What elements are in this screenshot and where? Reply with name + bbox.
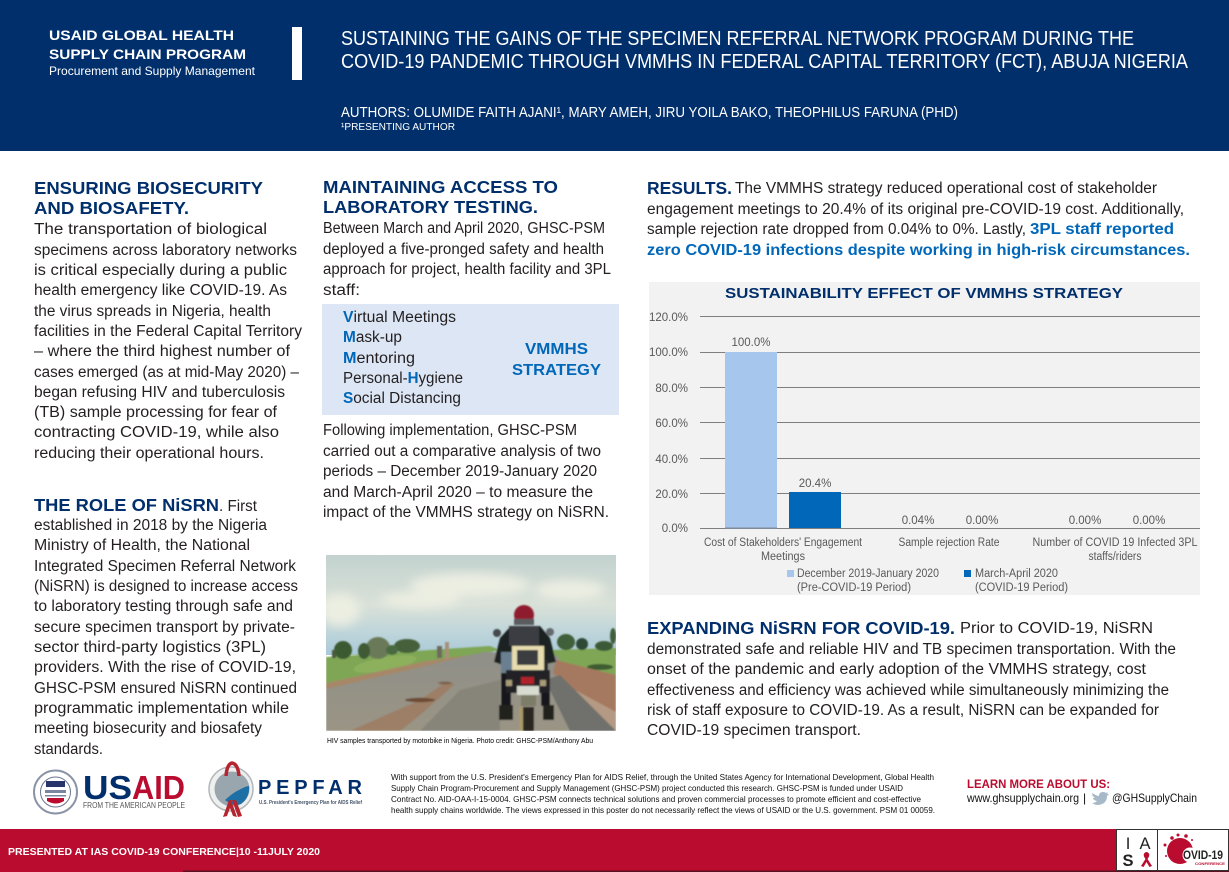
category labels: Sample rejection Rate: [898, 537, 1000, 549]
learn more links: www.ghsupplychain.org: [966, 791, 1079, 805]
learn more links: |: [1083, 791, 1086, 805]
section: results: [647, 178, 1190, 259]
section: the role of NiSRN: programmatic implementation while: [34, 700, 289, 717]
legend: March-April 2020: [975, 568, 1058, 580]
VMMHS list: Mask-up: [343, 329, 402, 346]
section: maintaining access to laboratory testing: MAINTAINING ACCESS TO: [323, 177, 558, 197]
section: results: zero COVID-19 infections despite working in high-risk circumstances.: [647, 242, 1190, 259]
logo: IAS and COVID-19 conference: I: [1126, 835, 1130, 853]
section: results: RESULTS.: [647, 178, 732, 198]
y axis labels: 120.0%: [649, 312, 688, 324]
text block: funding disclaimer: Contract No. AID-OAA-I-15-0004. GHSC-PSM connects technical solutions and proven commercial processes to promote efficient and cost-effective: [391, 794, 921, 804]
rider: [494, 626, 556, 668]
data labels: 0.00%: [1069, 515, 1101, 527]
section: expanding NiSRN for COVID-19: onset of the pandemic and early adoption of the VMMHS strategy, cost: [647, 661, 1147, 678]
section: ensuring biosecurity and biosafety: ENSURING BIOSECURITY: [34, 178, 263, 198]
y axis labels: 80.0%: [655, 383, 688, 395]
logo: USAID: AID: [132, 769, 185, 806]
category labels: staffs/riders: [1088, 551, 1142, 563]
VMMHS list: Mentoring: [343, 350, 415, 367]
category labels: [704, 537, 1198, 563]
section: ensuring biosecurity and biosafety: began refusing HIV and tuberculosis: [34, 384, 285, 401]
logo: USAID: FROM THE AMERICAN PEOPLE: [83, 801, 185, 810]
text block: funding disclaimer: [391, 772, 935, 815]
data labels: 20.4%: [799, 478, 831, 490]
section: ensuring biosecurity and biosafety: reducing their operational hours.: [34, 445, 264, 462]
logo: USAID: US: [83, 769, 132, 806]
section: ensuring biosecurity and biosafety: the virus spreads in Nigeria, health: [34, 303, 271, 320]
section: expanding NiSRN for COVID-19: COVID-19 specimen transport.: [647, 722, 861, 739]
VMMHS strategy label: [512, 341, 602, 379]
y axis labels: 20.0%: [655, 489, 688, 501]
logo: IAS and COVID-19 conference: A: [1139, 835, 1151, 853]
text block: funding disclaimer: With support from the U.S. President's Emergency Plan for AIDS Relief, through the United States Agency for International Development, Global Health: [391, 772, 934, 782]
section: maintaining access to laboratory testing: [323, 177, 611, 299]
data labels: 0.00%: [1133, 515, 1165, 527]
VMMHS list: Personal-Hygiene: [343, 370, 463, 387]
legend: (COVID-19 Period): [975, 582, 1068, 594]
section: the role of NiSRN: sector third-party logistics (3PL): [34, 639, 266, 656]
data labels: 0.00%: [966, 515, 998, 527]
section: ensuring biosecurity and biosafety: facilities in the Federal Capital Territory: [34, 323, 302, 340]
VMMHS list: Social Distancing: [343, 390, 461, 407]
learn more links: LEARN MORE ABOUT US:: [967, 777, 1110, 791]
text block: comparative analysis: periods – December 2019-January 2020: [323, 463, 597, 480]
section: results: 3PL staff reported: [1030, 221, 1174, 238]
section: maintaining access to laboratory testing: approach for project, health facility and 3PL: [323, 261, 611, 278]
section: results: The VMMHS strategy reduced operational cost of stakeholder: [735, 180, 1157, 197]
icon: twitter bird: [1092, 792, 1109, 805]
section: ensuring biosecurity and biosafety: AND BIOSAFETY.: [34, 198, 189, 218]
chart: sustainability effect of VMMHS strategy: [649, 282, 1200, 595]
text block: comparative analysis: [323, 422, 609, 521]
y axis labels: 60.0%: [655, 418, 688, 430]
section: the role of NiSRN: meeting biosecurity and biosafety: [34, 720, 262, 737]
section: the role of NiSRN: [34, 495, 298, 758]
section: ensuring biosecurity and biosafety: is critical especially during a public: [34, 262, 287, 279]
section: results: sample rejection rate dropped from 0.04% to 0%. Lastly,: [647, 221, 1026, 238]
authors: ¹PRESENTING AUTHOR: [341, 121, 455, 133]
poster title: [341, 28, 1189, 73]
section: the role of NiSRN: GHSC-PSM ensured NiSRN continued: [34, 680, 297, 697]
section: results: engagement meetings to 20.4% of its original pre-COVID-19 cost. Additionally,: [647, 201, 1184, 218]
section: expanding NiSRN for COVID-19: risk of staff exposure to COVID-19. As a result, NiSRN can be expanded for: [647, 702, 1159, 719]
photo caption: HIV samples transported by motorbike in Nigeria. Photo credit: GHSC-PSM/Anthony Abu: [327, 738, 593, 745]
learn more links: @GHSupplyChain: [1112, 791, 1197, 805]
authors: [341, 105, 958, 133]
section: ensuring biosecurity and biosafety: [34, 178, 302, 462]
section: maintaining access to laboratory testing: Between March and April 2020, GHSC-PSM: [323, 220, 605, 237]
section: the role of NiSRN: secure specimen transport by private-: [34, 619, 295, 636]
legend: [787, 568, 1068, 594]
logo: IAS and COVID-19 conference: CONFERENCE: [1195, 861, 1225, 866]
category labels: Cost of Stakeholders' Engagement: [704, 537, 863, 549]
category labels: Meetings: [761, 551, 805, 563]
VMMHS strategy label: VMMHS: [525, 341, 588, 358]
logo: USAID: [34, 769, 185, 814]
panel: VMMHS strategy box: [322, 304, 619, 415]
VMMHS list: Virtual Meetings: [343, 309, 456, 326]
section: the role of NiSRN: established in 2018 by the Nigeria: [34, 517, 267, 534]
section: maintaining access to laboratory testing: deployed a five-pronged safety and health: [323, 241, 604, 258]
learn more links: [966, 777, 1197, 805]
logo: IAS and COVID-19 conference: [1116, 829, 1229, 871]
section: the role of NiSRN: providers. With the rise of COVID-19,: [34, 659, 296, 676]
section: ensuring biosecurity and biosafety: cases emerged (as at mid-May 2020) –: [34, 364, 299, 381]
section: expanding NiSRN for COVID-19: [647, 618, 1176, 739]
text block: comparative analysis: carried out a comparative analysis of two: [323, 443, 601, 460]
logo: PEPFAR: PEPFAR: [258, 777, 363, 799]
section: maintaining access to laboratory testing: staff:: [323, 282, 360, 299]
header divider bar: [292, 27, 302, 80]
y axis labels: 40.0%: [655, 454, 688, 466]
section: ensuring biosecurity and biosafety: The transportation of biological: [34, 221, 267, 238]
data labels: [731, 337, 1165, 527]
text block: comparative analysis: and March-April 2020 – to measure the: [323, 484, 593, 501]
VMMHS strategy label: STRATEGY: [512, 362, 602, 379]
section: the role of NiSRN: to laboratory testing through safe and: [34, 598, 293, 615]
program name: [49, 27, 256, 78]
y axis labels: [649, 312, 688, 535]
section: ensuring biosecurity and biosafety: contracting COVID-19, while also: [34, 424, 279, 441]
section: the role of NiSRN: standards.: [34, 741, 103, 758]
section: the role of NiSRN: (NiSRN) is designed to increase access: [34, 578, 298, 595]
chart title: SUSTAINABILITY EFFECT OF VMMHS STRATEGY: [725, 285, 1123, 302]
logo: PEPFAR: [209, 763, 363, 817]
category labels: Number of COVID 19 Infected 3PL: [1032, 537, 1198, 549]
header banner: [0, 0, 1229, 151]
section: maintaining access to laboratory testing: LABORATORY TESTING.: [323, 197, 538, 217]
logo: IAS and COVID-19 conference: OVID-19: [1183, 848, 1223, 862]
VMMHS list: [343, 309, 463, 407]
section: the role of NiSRN: THE ROLE OF NiSRN: [34, 495, 219, 515]
logo: PEPFAR: U.S. President's Emergency Plan for AIDS Relief: [259, 800, 362, 806]
footer band: [0, 829, 1229, 872]
y axis labels: 0.0%: [662, 523, 688, 535]
poster title: SUSTAINING THE GAINS OF THE SPECIMEN REFERRAL NETWORK PROGRAM DURING THE: [341, 28, 1134, 50]
section: ensuring biosecurity and biosafety: (TB) sample processing for fear of: [34, 404, 278, 421]
text block: funding disclaimer: Supply Chain Program-Procurement and Supply Management (GHSC-PSM) project conducted this research. GHSC-PSM is funded under USAID: [391, 783, 903, 793]
section: ensuring biosecurity and biosafety: health emergency like COVID-19. As: [34, 282, 287, 299]
section: expanding NiSRN for COVID-19: Prior to COVID-19, NiSRN: [960, 620, 1153, 637]
photo: motorbike rider on road: [320, 555, 616, 731]
data labels: 0.04%: [902, 515, 934, 527]
section: expanding NiSRN for COVID-19: demonstrated safe and reliable HIV and TB specimen transportation. With the: [647, 641, 1176, 658]
program name: SUPPLY CHAIN PROGRAM: [49, 46, 246, 62]
data labels: 100.0%: [731, 337, 771, 349]
text block: comparative analysis: impact of the VMMHS strategy on NiSRN.: [323, 504, 609, 521]
section: expanding NiSRN for COVID-19: effectiveness and efficiency was achieved while simultaneously minimizing the: [647, 682, 1169, 699]
legend: (Pre-COVID-19 Period): [797, 582, 911, 594]
text block: funding disclaimer: health supply chains worldwide. The views expressed in this poster do not necessarily reflect the views of USAID or the U.S. government. PSM 01 00059.: [391, 805, 935, 815]
section: the role of NiSRN: . First: [219, 498, 258, 515]
text block: comparative analysis: Following implementation, GHSC-PSM: [323, 422, 577, 439]
program name: Procurement and Supply Management: [49, 64, 256, 78]
section: ensuring biosecurity and biosafety: specimens across laboratory networks: [34, 242, 297, 259]
section: ensuring biosecurity and biosafety: – where the third highest number of: [34, 343, 291, 360]
conference line: PRESENTED AT IAS COVID-19 CONFERENCE|10 -11JULY 2020: [8, 846, 320, 858]
section: the role of NiSRN: Integrated Specimen Referral Network: [34, 558, 296, 575]
section: expanding NiSRN for COVID-19: EXPANDING NiSRN FOR COVID-19.: [647, 618, 955, 638]
bars: [725, 352, 841, 529]
authors: AUTHORS: OLUMIDE FAITH AJANI¹, MARY AMEH, JIRU YOILA BAKO, THEOPHILUS FARUNA (PHD): [341, 105, 958, 121]
logo: IAS and COVID-19 conference: S: [1122, 852, 1134, 870]
program name: USAID GLOBAL HEALTH: [49, 27, 234, 43]
section: the role of NiSRN: Ministry of Health, the National: [34, 537, 250, 554]
y axis labels: 100.0%: [649, 347, 688, 359]
legend: December 2019-January 2020: [797, 568, 939, 580]
